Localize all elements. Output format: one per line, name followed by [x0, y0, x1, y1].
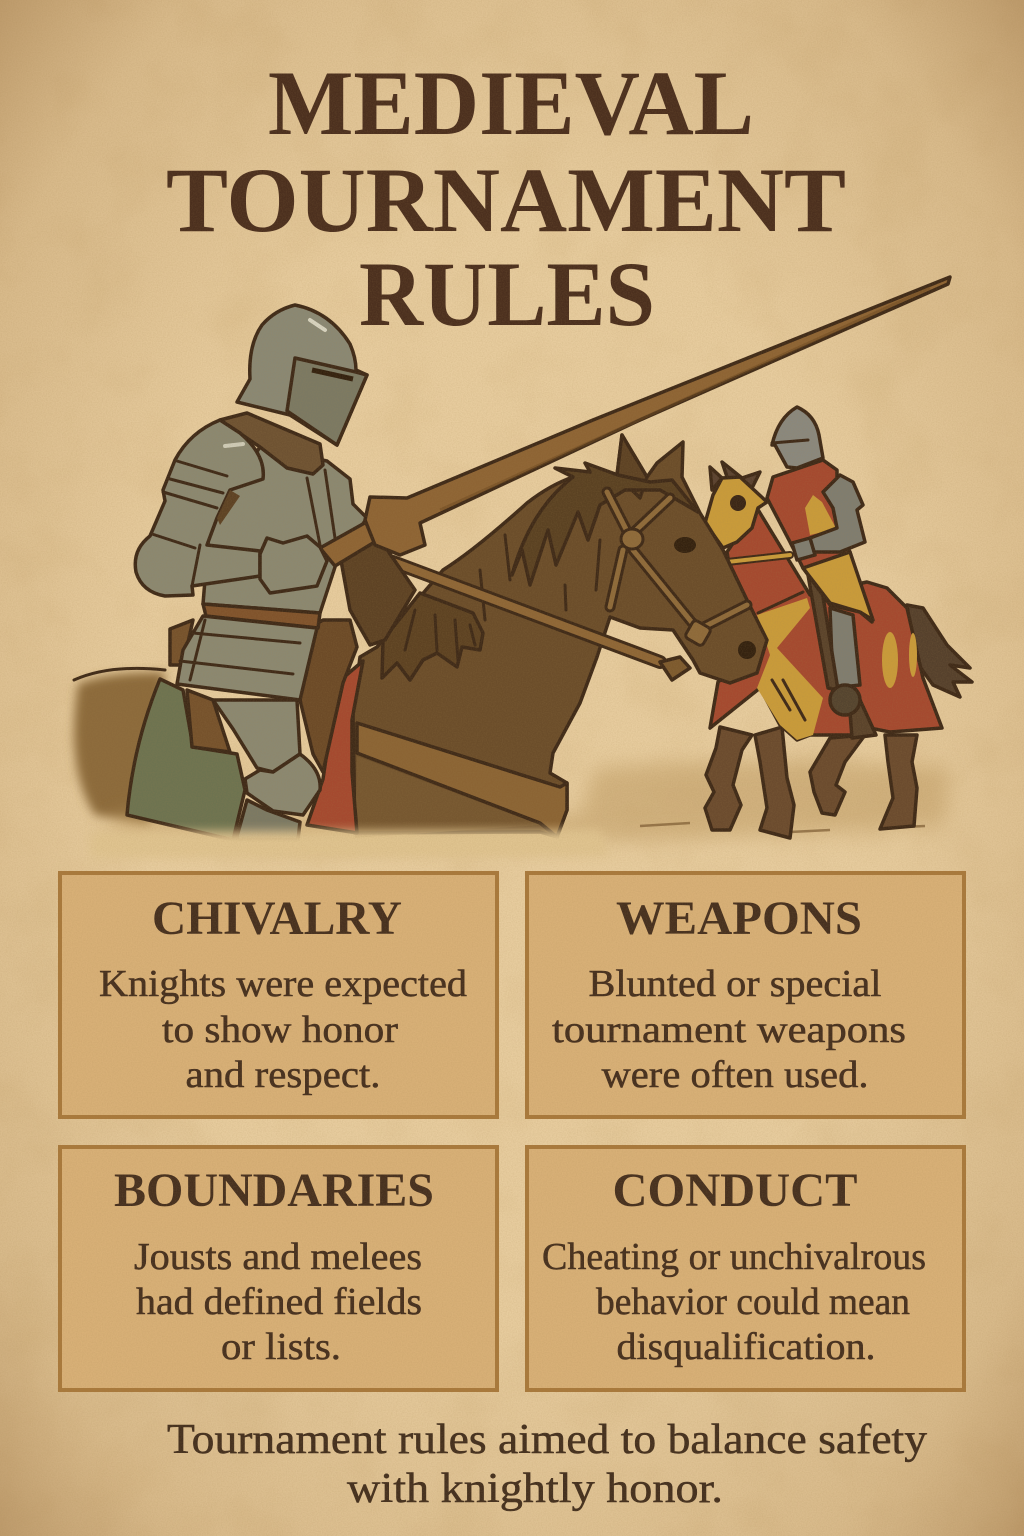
small knight helmet	[772, 407, 823, 468]
text: conduct: disqualification.	[616, 1326, 876, 1368]
girth band	[357, 723, 567, 837]
small knight leg and foot	[808, 575, 876, 738]
text: weapons: tournament weapons	[552, 1009, 906, 1051]
collar	[220, 413, 323, 474]
panel: weapons	[527, 873, 964, 1117]
small knight arm	[792, 475, 865, 560]
title: RULES	[359, 243, 655, 345]
leg	[213, 700, 300, 772]
text: chivalry	[99, 963, 467, 1096]
heading: conduct: CONDUCT	[612, 1164, 858, 1217]
horse eye	[674, 537, 696, 553]
panel: boundaries	[60, 1147, 497, 1390]
closing statement: Tournament rules aimed to balance safety	[167, 1417, 927, 1463]
heading: chivalry: CHIVALRY	[152, 892, 402, 945]
text: chivalry: and respect.	[186, 1054, 380, 1096]
title: TOURNAMENT	[166, 149, 846, 251]
arm	[135, 420, 263, 596]
text: conduct: Cheating or unchivalrous	[542, 1236, 926, 1278]
horse legs	[705, 727, 917, 838]
text: boundaries: Jousts and melees	[134, 1236, 422, 1278]
red saddle blanket	[307, 661, 363, 833]
horse body and neck	[353, 435, 767, 837]
closing statement: with knightly honor.	[347, 1466, 723, 1512]
closing statement	[167, 1417, 927, 1512]
heading: boundaries: BOUNDARIES	[114, 1164, 434, 1217]
hanging mane	[382, 593, 483, 680]
reins	[393, 562, 690, 680]
saddle	[170, 620, 357, 772]
text: conduct: behavior could mean	[596, 1281, 910, 1323]
panel: conduct	[527, 1147, 964, 1390]
waist faulds	[177, 616, 317, 700]
text: boundaries: or lists.	[221, 1326, 341, 1368]
illustration: jousting knights	[74, 277, 972, 858]
small knight surcoat	[767, 460, 873, 622]
text: chivalry: Knights were expected	[99, 963, 467, 1005]
ground fade along the bottom edge	[90, 830, 610, 858]
belt	[203, 604, 320, 628]
text: chivalry: to show honor	[162, 1009, 398, 1051]
green cloth	[127, 679, 245, 840]
lance grip	[320, 520, 378, 566]
title: MEDIEVAL	[268, 52, 754, 154]
horse tail	[907, 605, 972, 697]
main horse	[307, 435, 767, 838]
ground shading	[74, 668, 950, 850]
title	[166, 52, 846, 345]
text: weapons: Blunted or special	[588, 963, 882, 1005]
top mane	[480, 463, 698, 620]
shin	[236, 800, 300, 840]
horse ear	[617, 435, 647, 498]
torso	[203, 447, 367, 613]
horse nostril	[738, 641, 756, 659]
heading: weapons: WEAPONS	[616, 892, 862, 945]
text: boundaries	[134, 1236, 422, 1368]
helmet	[237, 305, 367, 445]
horse hood	[705, 462, 767, 548]
gauntlet	[260, 536, 327, 593]
text: boundaries: had defined fields	[136, 1281, 422, 1323]
lance	[365, 277, 950, 555]
main knight	[127, 305, 415, 840]
panel: chivalry	[60, 873, 497, 1117]
background knight on horse	[705, 407, 972, 838]
bridle	[607, 492, 747, 647]
horse caparison	[710, 508, 942, 740]
text: conduct	[542, 1236, 926, 1368]
lower body fade	[355, 756, 540, 838]
text: weapons: were often used.	[602, 1054, 868, 1096]
horse shoulder behind hand	[340, 525, 415, 645]
knee	[245, 754, 320, 815]
text: weapons	[552, 963, 906, 1096]
